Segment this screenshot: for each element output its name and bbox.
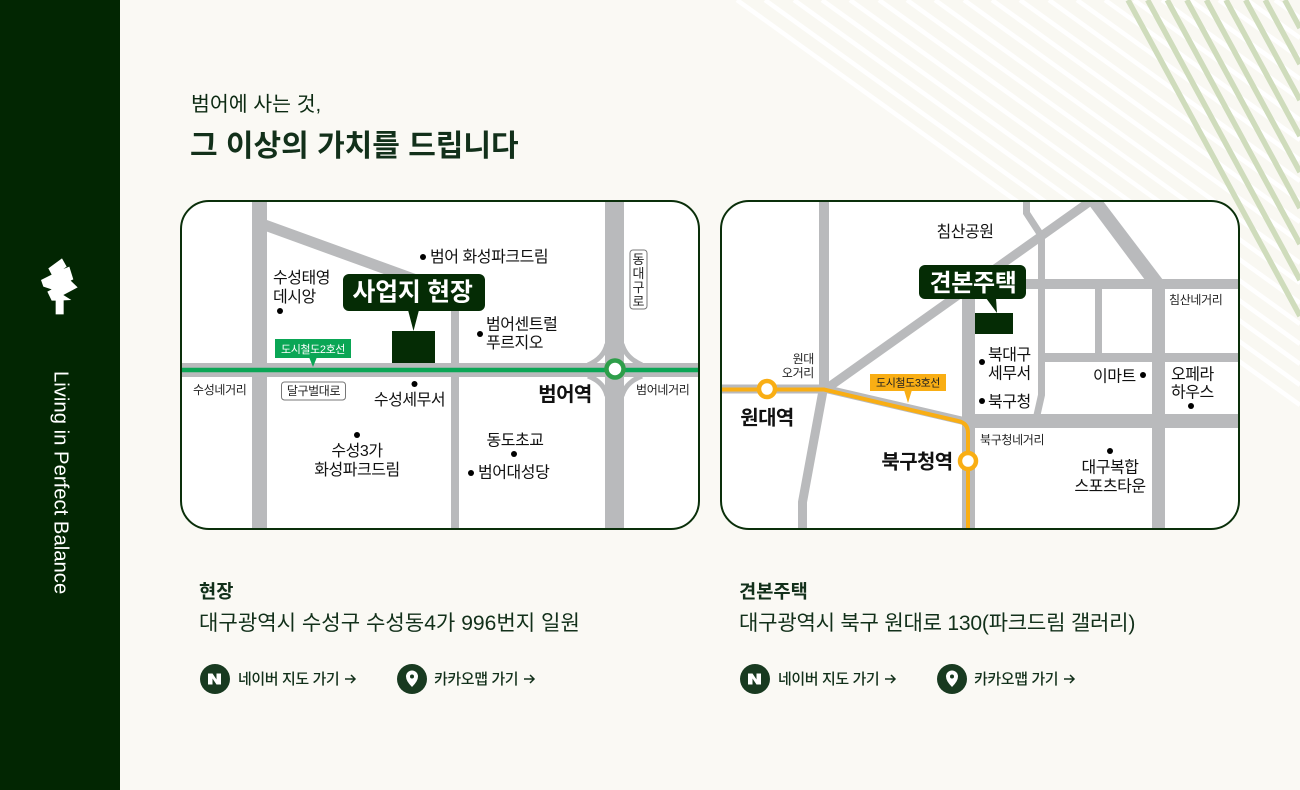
map labels: 세무서 <box>988 364 1031 382</box>
map labels: 북구청 <box>988 393 1031 411</box>
link: naver house: 네이버 지도 가기 <box>778 671 879 688</box>
road label: 동대구로: 동 <box>633 252 645 267</box>
map labels: 화성파크드림 <box>314 461 400 479</box>
text block: site address: 대구광역시 수성구 수성동4가 996번지 일원 <box>199 611 580 635</box>
map labels: 원대역 <box>740 406 794 430</box>
map labels: 침산네거리 <box>1169 293 1222 307</box>
station marker <box>606 360 624 378</box>
map labels: 수성네거리 <box>193 383 246 397</box>
road label: 동대구로: 대 <box>633 266 644 281</box>
link: kakao house <box>937 664 1074 694</box>
metro tag line 2: 도시철도2호선 <box>281 343 345 356</box>
map labels: 범어대성당 <box>478 464 550 482</box>
road label: 달구벌대로 <box>282 382 346 400</box>
map labels: 범어네거리 <box>636 383 689 397</box>
heading <box>190 93 519 163</box>
map labels: 동도초교 <box>486 432 544 450</box>
heading: 그 이상의 가치를 드립니다 <box>190 130 519 163</box>
link: kakao site <box>397 664 534 694</box>
map labels: 침산공원 <box>936 223 994 241</box>
link: naver house <box>740 664 895 694</box>
link: kakao house: 카카오맵 가기 <box>974 671 1058 688</box>
station marker: 원대역 <box>759 381 775 397</box>
heading: 범어에 사는 것, <box>191 93 321 116</box>
map labels: 이마트 <box>1093 368 1136 386</box>
map labels: 범어역 <box>538 383 592 406</box>
map labels: 수성태영 <box>273 269 330 287</box>
roads <box>721 200 1239 529</box>
map labels <box>740 223 1222 496</box>
site callout <box>343 274 485 363</box>
map labels: 오페라 <box>1171 366 1215 384</box>
map labels: 하우스 <box>1171 384 1214 402</box>
map labels: 데시앙 <box>273 288 317 306</box>
map labels: 북구청네거리 <box>980 433 1044 447</box>
road label: 동대구로: 로 <box>633 294 645 309</box>
sidebar slogan: Living in Perfect Balance <box>50 371 72 594</box>
panel: map house <box>721 200 1239 529</box>
sidebar <box>0 0 120 790</box>
metro tag line 2 <box>275 339 351 367</box>
metro tag line 3 <box>870 374 946 403</box>
site callout: 사업지 현장 <box>352 278 473 306</box>
road label: 달구벌대로: 달구벌대로 <box>287 384 340 398</box>
map labels: 푸르지오 <box>486 334 543 352</box>
map labels: 대구복합 <box>1081 458 1139 476</box>
map labels: 북구청역 <box>881 450 953 474</box>
house callout <box>919 265 1026 334</box>
link: naver site <box>200 664 355 694</box>
map labels: 수성세무서 <box>374 391 445 409</box>
station marker: 북구청역 <box>960 453 976 469</box>
road label: 동대구로 <box>630 250 647 309</box>
text block: site address <box>199 581 580 635</box>
panel: map site <box>181 201 699 529</box>
map labels: 북대구 <box>988 346 1031 364</box>
map labels: 원대 <box>793 352 814 366</box>
house callout: 견본주택 <box>929 270 1017 297</box>
background stripes <box>737 0 1300 405</box>
map labels <box>193 248 689 482</box>
map labels: 스포츠타운 <box>1074 478 1146 496</box>
text block: site address: 현장 <box>199 581 233 602</box>
text block: house address <box>739 581 1135 635</box>
road label: 동대구로: 구 <box>633 280 645 295</box>
metro tag line 3: 도시철도3호선 <box>876 376 940 390</box>
map labels: 범어 화성파크드림 <box>430 248 548 266</box>
text block: house address: 견본주택 <box>739 581 808 602</box>
map labels: 범어센트럴 <box>486 316 557 334</box>
link: naver site: 네이버 지도 가기 <box>238 671 339 688</box>
roads <box>181 201 699 529</box>
map labels: 오거리 <box>782 366 814 380</box>
map labels: 수성3가 <box>331 442 383 460</box>
link: kakao site: 카카오맵 가기 <box>434 671 518 688</box>
icon: tree logo <box>41 258 78 314</box>
text block: house address: 대구광역시 북구 원대로 130(파크드림 갤러리) <box>739 611 1135 635</box>
